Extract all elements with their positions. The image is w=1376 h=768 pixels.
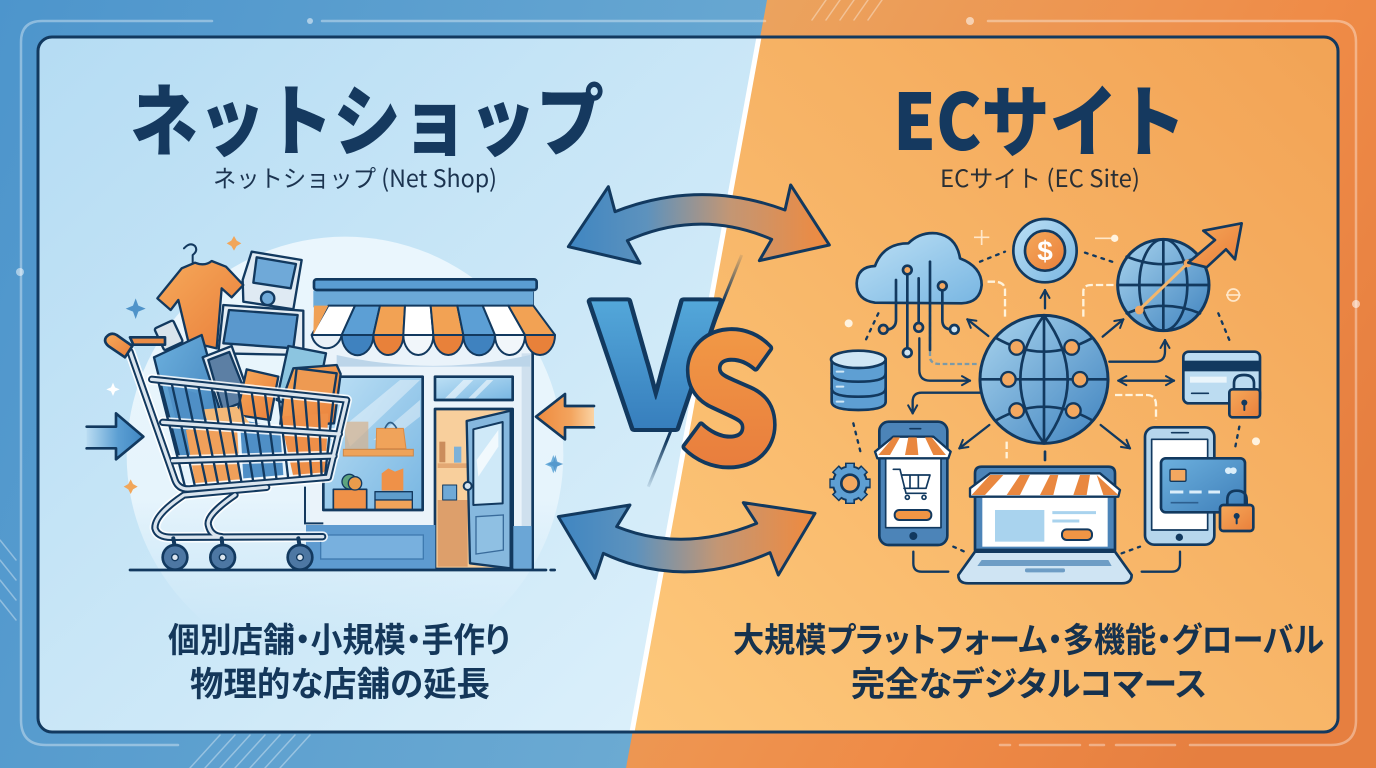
doorway interior [435,409,513,569]
title: net shop: ネットショップ [130,60,604,172]
shop building [305,279,555,570]
caption: net shop: 物理的な店舗の延長 [190,657,490,706]
connector lines [853,252,1239,572]
panel: net shop background [38,37,759,732]
base wall [305,487,532,569]
ground line [130,566,555,574]
illustration: cart and shop [87,236,563,673]
letter S: S [679,262,779,514]
icon: database [831,351,886,410]
VS mark [591,231,779,514]
arrow: inbound blue [87,413,143,459]
sparkle [547,455,563,473]
icon: gear [829,463,871,504]
transom [435,377,513,400]
letter V: V [591,231,719,477]
arrow: orange inbound [536,394,594,439]
caption: EC site: 大規模プラットフォーム・多機能・グローバル [733,613,1324,662]
bottom double arrow [558,503,815,578]
icon: phone with card and lock [1145,427,1253,545]
open door [464,411,511,568]
cart rails [130,352,347,537]
cart interior goods [167,383,328,483]
subtitle: net shop: ネットショップ (Net Shop) [213,159,497,194]
cart handle [105,334,165,357]
centre graphics [536,185,829,578]
shop window [323,377,423,510]
panel: EC site background [632,37,1338,732]
shopping cart [105,244,347,570]
icon: dollar coin: $ [1037,236,1053,267]
background: orange side [626,0,1376,768]
icon: phone with store and cart [875,422,951,545]
caption: EC site: 完全なデジタルコマース [851,657,1207,706]
cart contents [154,244,341,460]
backdrop circle [127,237,563,673]
icon: globe with growth arrow [1118,223,1242,331]
caption: EC site [733,613,1324,706]
subtitle: EC site: ECサイト (EC Site) [940,159,1140,194]
top double arrow [568,185,829,263]
basket bars [158,382,333,487]
cart halo [130,352,347,537]
cart wheels [163,538,312,570]
illustration: EC network [829,219,1260,583]
sparkles [106,236,562,494]
icon: credit card with lock [1183,352,1260,417]
caption: net shop: 個別店舗・小規模・手作り [168,613,510,662]
title: EC site: ECサイト [893,61,1186,173]
icon: laptop storefront [958,467,1132,583]
icon: cloud [857,233,982,357]
panel divider [632,37,759,732]
awning [312,306,555,355]
main globe [980,315,1108,443]
caption: net shop [168,613,510,706]
icon: dollar coin [1013,219,1077,282]
diagonal slash [648,255,742,487]
decorative bits [974,230,1241,301]
